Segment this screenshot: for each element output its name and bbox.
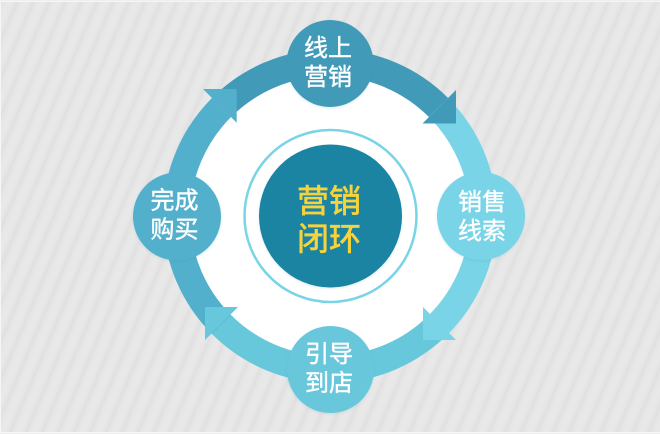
node: sales leads: 线索 (458, 218, 506, 245)
arc: left segment (177, 108, 222, 324)
center title: 营销 (297, 183, 361, 219)
node: complete purchase: 购买 (150, 216, 198, 244)
center badge (259, 144, 402, 288)
cycle ring (177, 63, 483, 369)
node: store visit: 到店 (305, 370, 353, 397)
node: online marketing (286, 20, 374, 107)
arrow: right to bottom (423, 307, 456, 340)
arrow: top to right (422, 90, 456, 124)
inner white disc (189, 75, 471, 357)
center ring (244, 130, 416, 302)
node: complete purchase (133, 172, 221, 260)
node: store visit: 引导 (305, 341, 353, 368)
arc: bottom segment (222, 324, 438, 369)
node: online marketing: 营销 (304, 64, 352, 91)
center title: 闭环 (297, 221, 361, 257)
arc: right segment (438, 108, 483, 324)
node: store visit (287, 326, 374, 413)
node: sales leads (437, 172, 525, 260)
arrow: bottom to left (205, 307, 238, 340)
arc: top segment (222, 63, 438, 108)
arrow: left to top (203, 89, 237, 123)
node: online marketing: 线上 (304, 35, 352, 62)
node: complete purchase: 完成 (150, 188, 198, 214)
node: sales leads: 销售 (458, 189, 506, 216)
